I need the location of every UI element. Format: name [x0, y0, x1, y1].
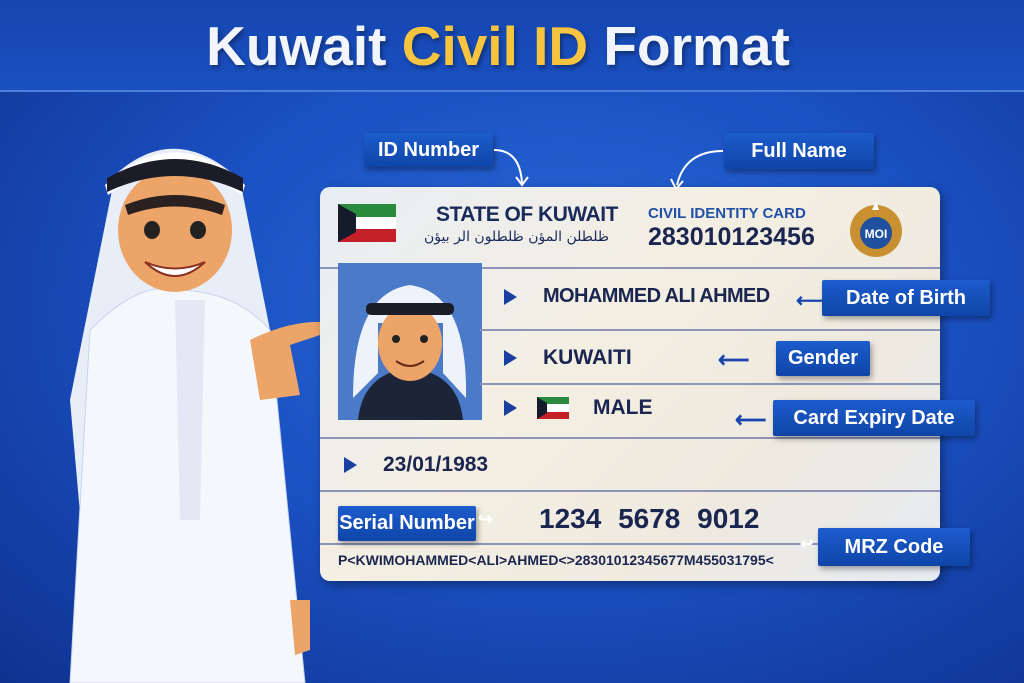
field: gender	[504, 396, 652, 419]
emblem: MOI	[865, 227, 887, 241]
ID card: 283010123456	[648, 223, 815, 251]
label: MRZ Code: MRZ Code	[845, 536, 943, 558]
label: ID Number	[364, 133, 493, 167]
MRZ: P<KWIMOHAMMED<ALI>AHMED<>28301012345677M455031795<	[338, 552, 774, 568]
label: Gender	[776, 341, 870, 376]
header text: STATE OF KUWAIT	[436, 203, 618, 226]
label: Gender: Gender	[788, 347, 858, 369]
photo	[338, 263, 482, 420]
arrow: Full Name	[670, 150, 723, 190]
label: ID Number: ID Number	[378, 138, 479, 160]
title band	[0, 0, 1024, 92]
ID card: ظلطلن المؤن ظلطلون الر بيؤن	[424, 229, 609, 245]
ID card	[320, 187, 940, 581]
label: Date of Birth	[822, 280, 990, 316]
label: Date of Birth: Date of Birth	[846, 286, 966, 308]
field: nationality: KUWAITI	[543, 346, 632, 369]
field: date: 23/01/1983	[383, 453, 488, 476]
field: name: MOHAMMED ALI AHMED	[543, 285, 770, 307]
label: Card Expiry Date: Card Expiry Date	[793, 406, 955, 428]
label: Full Name	[724, 133, 874, 169]
label: Serial Number: Serial Number	[339, 512, 475, 534]
arrow: serial: ↪	[478, 509, 493, 529]
title: Kuwait Civil ID Format	[206, 15, 790, 77]
label: Serial Number	[338, 506, 476, 541]
field: gender: MALE	[593, 396, 652, 419]
arrow: Expiry: ⟵	[735, 407, 767, 432]
field: nationality	[504, 346, 632, 369]
arrow: MRZ: ↩	[800, 536, 813, 553]
serial: 1234 5678 9012	[539, 503, 759, 534]
arrow: ID Number	[494, 149, 529, 186]
flag	[338, 204, 396, 242]
arrow: DOB: ⟵	[796, 290, 825, 312]
arrow: Gender: ⟵	[718, 347, 750, 372]
ID card: CIVIL IDENTITY CARD	[648, 205, 806, 222]
label: MRZ Code	[818, 528, 970, 566]
emblem	[850, 202, 902, 257]
label: Full Name: Full Name	[751, 140, 847, 162]
man illustration	[70, 148, 320, 683]
label: Card Expiry Date	[773, 400, 975, 436]
